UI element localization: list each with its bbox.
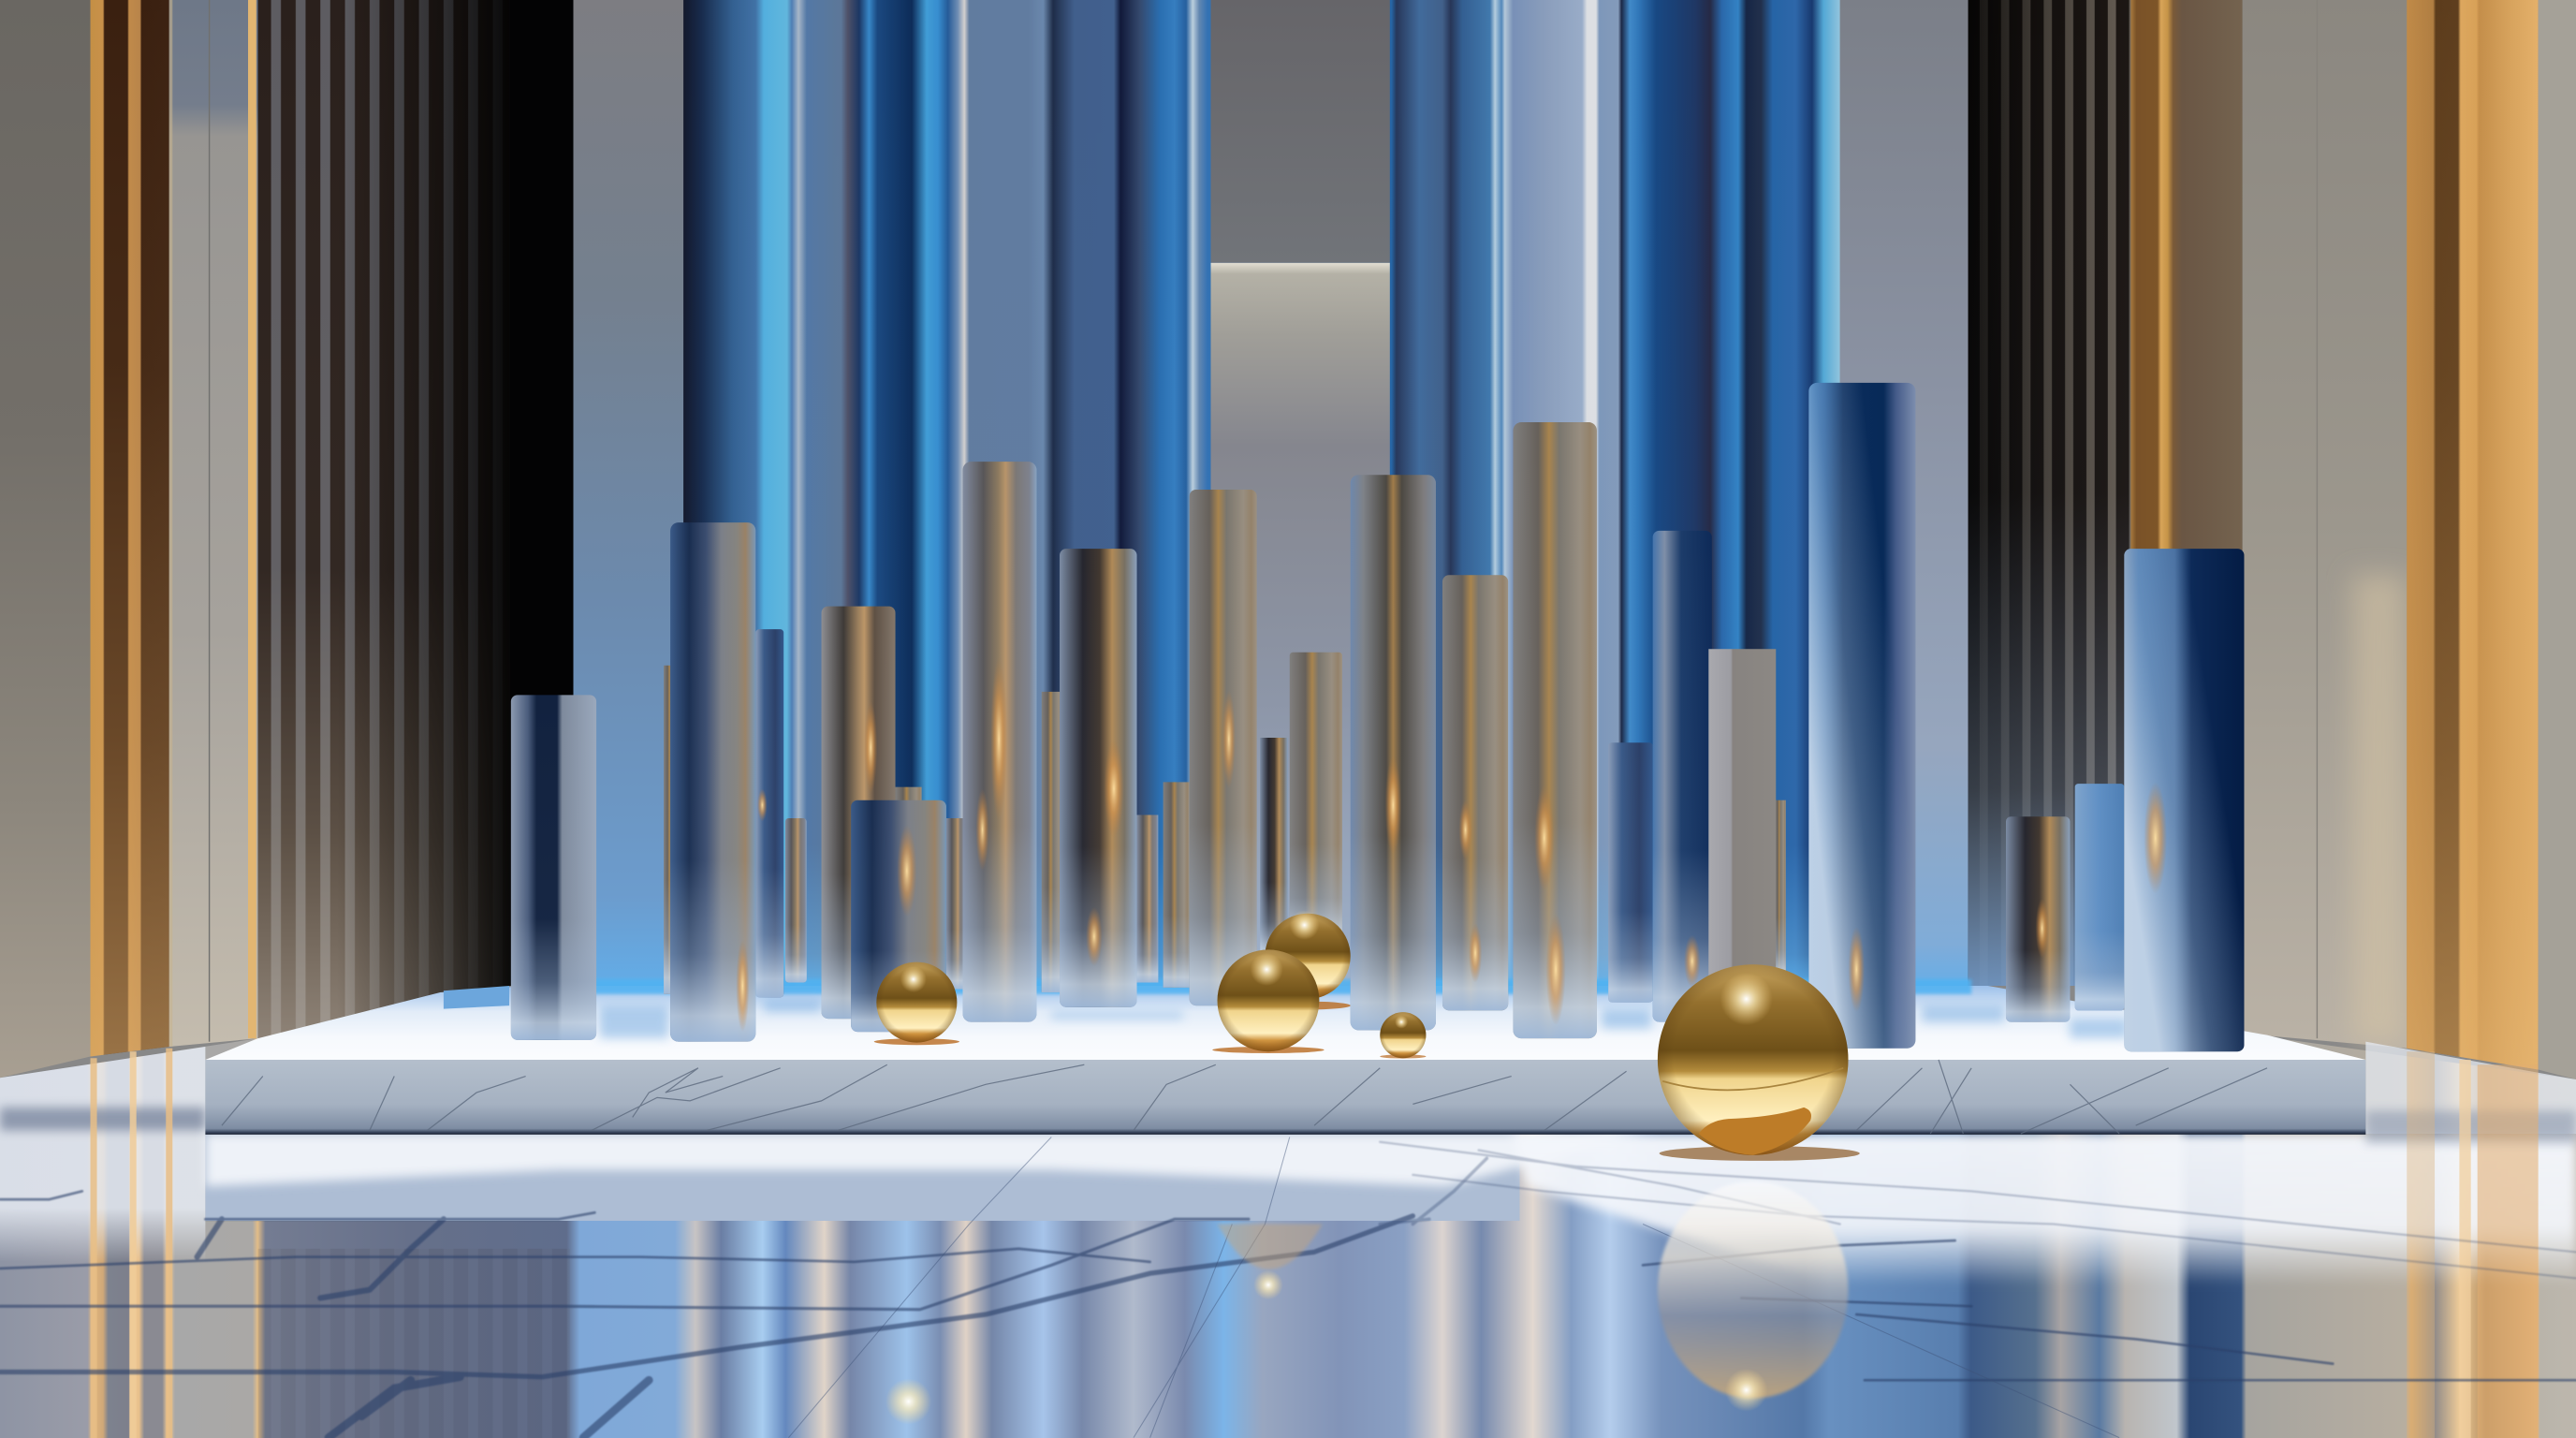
column: navy front right [2124, 549, 2244, 1051]
column: bronze 878 [1442, 575, 1508, 1010]
gold strip reflections over fog right [2407, 1051, 2539, 1438]
column: back 785 [1290, 653, 1342, 948]
alcove: grey upper wall [1211, 0, 1390, 263]
column: right back 1221 [2006, 816, 2070, 1022]
wall panel: blue-grey left [574, 0, 685, 994]
front row columns [511, 383, 2244, 1051]
marble veins on floor [0, 1142, 2576, 1438]
column: back 767 [1260, 738, 1288, 960]
backdrop blue light columns [683, 0, 1840, 994]
reflection of centre spheres [1218, 1224, 1323, 1299]
sphere: large front [1658, 964, 1860, 1161]
platform shadow on floor [205, 1134, 1519, 1221]
floor fog right top [2365, 1042, 2576, 1134]
sphere: small left [874, 962, 959, 1045]
column: bronze 500 [822, 607, 896, 1019]
golden spheres [874, 910, 1860, 1425]
left wall panels [0, 0, 685, 1078]
wall panel: far right [2539, 0, 2576, 1079]
column: silver 518 [851, 800, 946, 1032]
column: textured stone 1040 [1708, 649, 1776, 977]
column: tall silver 408 [670, 522, 755, 1042]
floor glint [886, 1378, 931, 1425]
floor shadow band left [0, 1108, 205, 1130]
column: back slim left [664, 666, 677, 994]
column: silver 645 [1060, 549, 1137, 1007]
sphere: centre [1212, 949, 1325, 1053]
gold light strips right [2407, 0, 2539, 1070]
ribbed dark panel right [1969, 0, 2130, 986]
column: tall bronze 921 [1513, 422, 1597, 1038]
column: tall silver 822 [1351, 475, 1436, 1030]
ribbed dark panel left [258, 0, 574, 1038]
column: back stub 1081 [1775, 800, 1786, 981]
column: back 708 [1164, 782, 1190, 988]
column: back 576 [946, 818, 966, 990]
column: back stub 545 [896, 787, 922, 807]
column: navy far left [511, 695, 596, 1040]
floor tile seams [788, 1137, 2119, 1438]
gold light strips left [91, 0, 169, 1056]
floor shadow band right [2365, 1110, 2576, 1143]
column: back slim 460 [755, 629, 783, 997]
wall panel: blue-grey right [1840, 0, 1969, 994]
bright floor area right [1512, 1134, 2576, 1284]
column: back 979 [1608, 742, 1653, 1003]
wall panel: beige right [2243, 0, 2407, 1049]
rear platform ledge left [444, 986, 509, 1009]
column: back 634 [1042, 692, 1063, 992]
floor fog left [0, 1047, 205, 1262]
column: tall silver 586 [962, 462, 1036, 1022]
column: tall bronze 724 [1190, 490, 1257, 1005]
column: back 692 [1137, 814, 1158, 983]
marble veins on platform [222, 1060, 2267, 1134]
blue glow at foot of columns [592, 979, 1971, 994]
column: navy 1006 [1653, 531, 1712, 1022]
marble floor with reflections [0, 1034, 2576, 1438]
sphere: tiny [1380, 1012, 1426, 1059]
reflections on platform top [600, 999, 2128, 1038]
column: tall navy 1101 [1808, 383, 1915, 1049]
reflection of large sphere [1658, 1181, 1848, 1412]
reflected ribs on floor [258, 1249, 570, 1438]
gold strip reflections over fog left [91, 1049, 172, 1438]
back wall and central alcove [574, 0, 1969, 1019]
platform front face [205, 1060, 2365, 1135]
sphere: rear centre [1265, 910, 1351, 1009]
gold and bronze panel right [2130, 0, 2243, 566]
column: back stub 478 [785, 818, 807, 983]
right wall panels [1840, 0, 2576, 1079]
shadow of large sphere [1660, 1146, 1860, 1161]
column: right back 1263 [2075, 784, 2124, 1010]
wall panel: beige left [169, 0, 258, 1047]
platform top surface [205, 986, 2365, 1060]
alcove: lit recess [1211, 263, 1390, 994]
back row columns [664, 629, 2124, 1022]
wall panel: far left [0, 0, 91, 1078]
warm light on right wall [2352, 575, 2405, 1043]
